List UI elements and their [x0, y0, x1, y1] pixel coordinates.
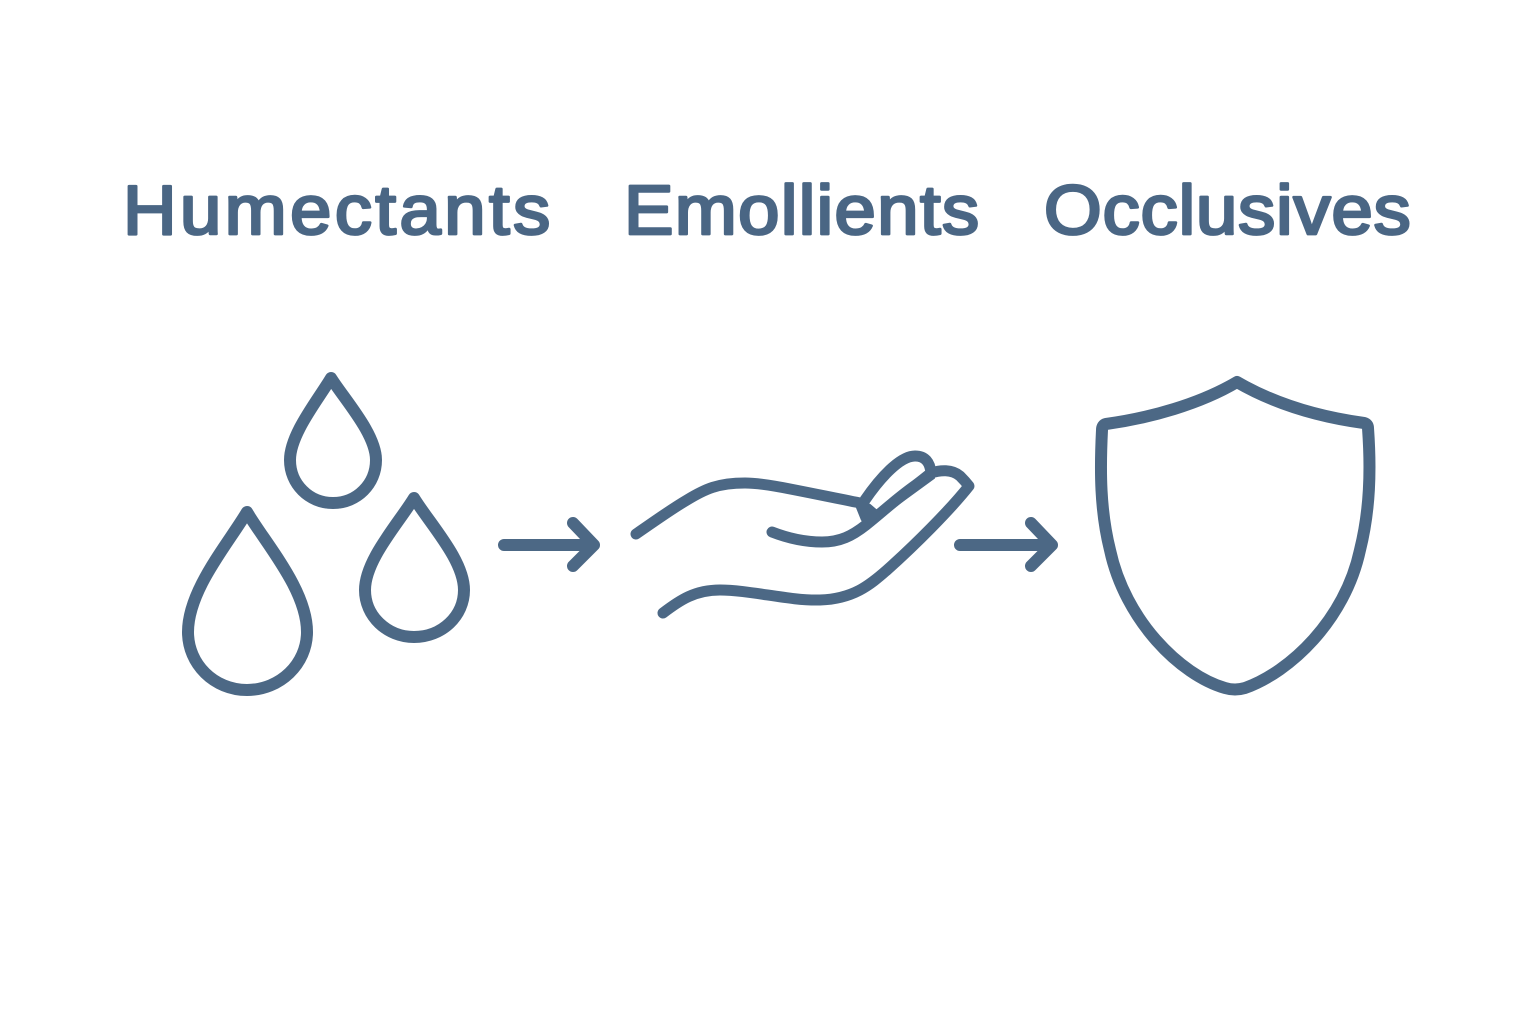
arrow: emollients to occlusives: [960, 523, 1052, 566]
icon: water drops: [188, 378, 464, 690]
finger joint thickening: [860, 474, 934, 526]
icon: shield: [1101, 382, 1369, 690]
heading: Humectants: Humectants: [123, 172, 550, 250]
heading: Emollients: Emollients: [624, 172, 979, 250]
icon: open hand: [636, 456, 969, 613]
heading: Occlusives: Occlusives: [1044, 172, 1411, 250]
arrow: humectants to emollients: [504, 523, 594, 566]
